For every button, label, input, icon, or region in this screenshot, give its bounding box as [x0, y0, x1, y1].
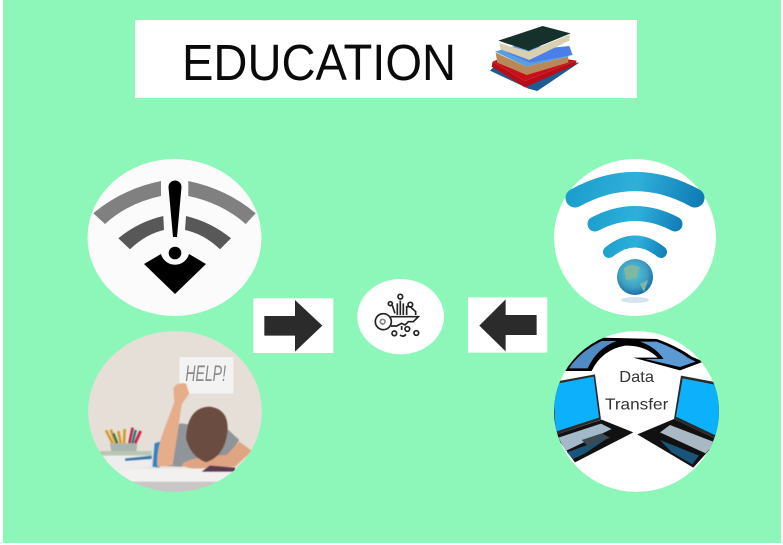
data transfer label	[605, 371, 668, 410]
title banner	[135, 20, 637, 98]
panel: wifi globe circle	[554, 159, 716, 316]
icon: globe	[617, 259, 653, 303]
title text: EDUCATION	[182, 34, 456, 91]
icon: signal wedge	[144, 254, 206, 294]
arrow: right-pointing	[253, 298, 333, 353]
pencil cup	[106, 428, 141, 454]
icon: stack of books	[490, 26, 579, 91]
desk	[113, 468, 237, 492]
panel: stressed student photo circle	[88, 331, 262, 492]
help sign	[179, 357, 233, 394]
books on desk	[100, 451, 235, 472]
student	[153, 383, 252, 468]
right laptop	[637, 376, 722, 468]
icon: wifi arcs	[575, 182, 695, 252]
panel: data transfer circle	[552, 331, 722, 492]
transfer arrow	[563, 338, 703, 371]
key circle	[357, 279, 444, 354]
icon: middle signal arcs	[118, 216, 231, 249]
data transfer label: Data	[619, 369, 654, 386]
left laptop	[552, 374, 633, 462]
icon: outer signal arcs	[93, 181, 256, 224]
icon: exclamation mark	[168, 180, 182, 259]
data transfer label: Transfer	[605, 397, 669, 414]
panel: wifi warning circle	[88, 159, 262, 316]
icon: digital key	[375, 294, 419, 336]
arrow: left-pointing	[468, 297, 547, 353]
help sign: HELP!	[185, 361, 226, 386]
